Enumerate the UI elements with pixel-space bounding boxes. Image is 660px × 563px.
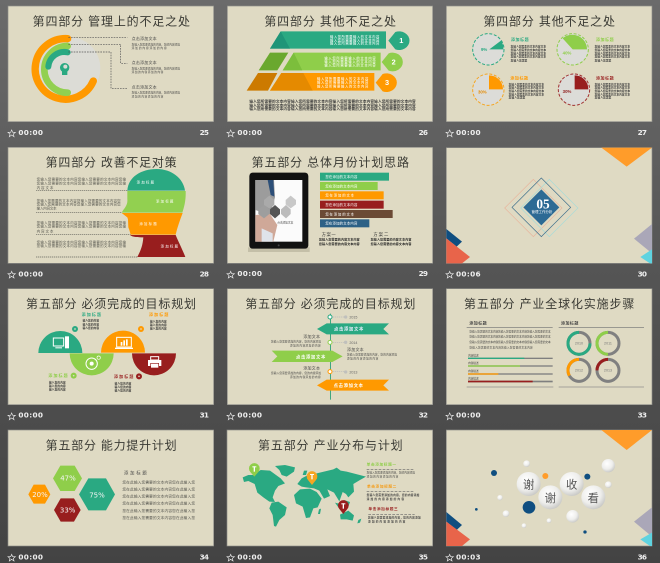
footer: 26 [419,128,428,137]
slide 31: goal semicircles [8,289,214,420]
progress bars: 内容描述 [468,376,479,380]
plan one [319,231,360,246]
concentric ring chart [35,37,100,100]
footer: 27 [638,128,647,137]
hexagon 47% [53,466,82,491]
ribbon teal [317,323,389,334]
ribbon green: 点击添加文本 [296,353,326,360]
pie captions: 您输入您需要的文本内容文本 [509,86,544,90]
slide 30: section divider 05 [446,148,652,278]
head silhouette: 添加标题 [161,244,179,249]
slide 28: head diagram [8,147,214,278]
plan one: 方案一 [322,231,336,238]
map legend [367,461,421,524]
pie captions: 您输入您需要 [595,96,612,100]
head silhouette [122,169,186,257]
left text rows: 输入内容文本 [37,205,57,210]
goal labels: 输入您的内容 [150,327,167,331]
left column text [467,320,553,349]
goal labels: 输入您的内容 [49,380,66,384]
map legend: 添加的内容添加的内容 [367,497,404,501]
slide 35: world map [227,430,433,561]
footer: 33 [638,411,647,420]
timeline captions: 您输入您需要添加的内容，您的内容添加 [271,340,321,344]
ribbon orange: 点击添加文本 [334,382,364,389]
donut charts: 2013 [604,369,612,373]
tablet photo [248,173,310,252]
timeline captions: 添加文本 [303,333,320,339]
horizontal bars [320,173,393,227]
left text rows: 您输入您需要的文本内容您输入您需要的文本内容您输 [37,239,126,244]
map pins [249,463,349,514]
footer: 00:06 [456,269,481,278]
head silhouette: 添加标题 [137,180,155,185]
tablet photo: 点击添加文本 [277,220,294,224]
left text rows: 您输入您需要的文本内容您输入您需要的文本内容您 [37,198,121,203]
pie captions: 您输入您需要的文本内容文本 [511,51,546,55]
number diamond [523,189,559,225]
slide 33: bars and donuts [446,289,652,420]
marker dots [71,326,144,379]
pyramid tier 3: 输入您所需要输入的文本内容 [317,76,369,81]
left column text: 您输入您需要的文本内容您输入您需要的文本内容您输入您需要的文本 [469,340,551,344]
pie captions: 您输入您需要 [595,58,612,62]
right text block [122,469,195,520]
dense text block [249,99,416,111]
footer [227,552,428,561]
callout text: 添加的内容添加的内容 [132,70,164,74]
donut charts: 2011 [604,342,612,346]
right text block: 您在此输入您需要的文本内容您在此输入您 [122,486,195,491]
number diamond: 管理工作分析 [532,209,553,214]
progress bars: 内容描述 [468,369,479,373]
left column text: 您输入您需要的文本内容您输入您需要的文本内容 [469,345,533,349]
world map [243,465,366,527]
goal labels: 输入您的内容 [49,384,66,388]
footer: 00:00 [18,269,43,278]
footer: 30 [638,269,647,278]
left text rows: 您输入您需要的文本内容您输入您需要的文本内容您输 [37,220,126,225]
left text rows: 内容文本 [37,228,54,233]
dense text block: 输入您所需要的文本内容输入您所需要的文本内容输入您所需要的文本内容输入您所需要的文本内容 [249,106,416,111]
goal labels: 输入您的内容 [115,381,132,385]
goal labels: 输入您的内容 [83,322,99,326]
timeline captions: 添加的内容添加的内容 [347,356,379,360]
title: 第五部分 产业分布与计划 [258,437,403,452]
head silhouette: 添加标题 [156,199,174,204]
callout text: 点击添加文本 [132,84,157,90]
thank-you circles: 谢 [545,491,556,505]
year markers: 2013 [349,371,357,375]
goal labels: 输入您的内容 [115,389,132,393]
map legend: 添加的内容添加的内容 [367,474,399,478]
right text block: 您在此输入您需要的文本内容您在此输入您 [122,508,195,513]
footer [8,552,209,561]
timeline captions: 您输入您需要添加的内容，您的内容添加 [347,352,397,356]
pie teal [473,34,504,65]
left column text: 添加标题 [469,320,487,326]
footer [446,269,647,278]
hexagon 33%: 33% [60,507,76,515]
map legend: 添加的内容添加的内容 [368,520,406,524]
timeline captions: 您输入您需要添加的内容，您的内容添加 [271,371,321,375]
goal labels: 输入您的内容 [83,319,99,323]
year markers: 2015 [349,316,357,320]
footer: 00:00 [237,128,262,137]
title: 第五部分 能力提升计划 [46,437,177,452]
goal labels: 输入您的内容 [150,319,167,323]
hexagon 33% [54,498,81,522]
plan two: 您输入您需要的内容文本内容 [371,237,411,242]
red semicircle with printer icon [132,353,176,375]
pie captions: 添加标题 [596,74,614,80]
footer: 35 [419,552,428,561]
title: 第五部分 总体月份计划思路 [252,155,409,170]
pyramid tier 1: 输入您所需要输入的文本内容 [330,37,380,42]
slide 27: four pie charts [446,6,652,137]
horizontal bars: 您在添加的文本 [325,193,355,198]
left text rows: 您输入您需要的文本内容您输入您需要的文本内容您输 [37,180,126,185]
pie orange [473,74,504,105]
pyramid tier 1 [270,31,386,49]
goal labels: 输入您的内容 [49,388,66,392]
plan one: 您输入您需要的内容文本内容 [319,237,360,242]
left text rows: 您输入您需要的文本内容您输入您需要的文本内容您 [37,202,121,207]
goal labels: 输入您的内容 [83,326,99,330]
footer: 28 [200,269,209,278]
year markers [328,315,357,375]
pie captions: 您输入您需要 [509,96,526,100]
footer [8,269,209,278]
hexagon 75% [79,478,115,510]
plan two [371,231,411,246]
title: 第四部分 其他不足之处 [264,13,396,28]
pie captions: 您输入您需要的文本内容文本 [509,82,544,86]
callout text: 您输入您需要添加的内容，您的内容添加 [132,91,180,95]
pie captions: 您输入您需要的文本内容文本 [595,86,630,90]
timeline captions [271,333,397,379]
goal labels: 添加标题 [48,372,68,378]
pyramid tier 2 [259,53,381,70]
footer: 00:00 [237,411,262,420]
map legend: 您输入您需要添加的内容，您的内容添加 [367,493,420,497]
horizontal bars: 您在添加的文本内容 [325,202,358,207]
horizontal bars: 您在添加的文本内容 [325,174,358,179]
footer: 00:00 [456,128,481,137]
map legend: 单击添加标题二 [367,484,397,489]
teal semicircle with computer icon [38,331,82,353]
corner shapes [446,430,652,546]
number badges: 1 [399,36,403,45]
year markers: 2014 [349,341,357,345]
donut charts: 2012 [575,369,583,373]
thank-you circles: 收 [566,477,577,491]
footer: 32 [419,411,428,420]
right text block: 添加标题 [124,469,147,476]
dense text block: 输入您所需要的文本内容输入您所需要的文本内容输入您所需要的文本内容输入您所需要的文本内容 [249,102,416,107]
pyramid tier 2: 输入您所需要输入的文本内容 [324,63,376,68]
pie red [558,74,590,105]
right text block: 您在此输入您需要的文本内容您在此输入您 [122,501,195,506]
footer [446,552,647,561]
title: 第五部分 必须完成的目标规划 [245,296,415,311]
slide 32: timeline [227,289,433,420]
hexagon 20%: 20% [32,491,48,499]
pyramid tier 2: 输入您所需要输入的文本内容 [324,55,376,60]
pie captions: 添加标题 [510,74,528,80]
horizontal bars: 您在添加的文本 [325,211,355,216]
footer [227,411,428,420]
pyramid tier 1: 输入您所需要输入的文本内容 [330,34,380,39]
timeline captions: 添加文本 [347,346,364,352]
pie captions: 您输入您需要的文本内容文本 [595,55,630,59]
left column text: 您输入您需要的文本内容您输入您需要的文本内容您输入您需要的文本 [469,335,551,339]
pie captions: 您输入您需要的文本内容文本 [511,48,546,52]
slide 34: hexagons [8,430,214,561]
footer: 00:03 [456,552,481,561]
left text rows [37,177,126,248]
goal labels: 输入您的内容 [150,323,167,327]
title: 第四部分 其他不足之处 [483,13,615,28]
number badges [376,31,410,92]
plan two: 您输入您需要的内容文本内容 [371,241,411,246]
footer [227,128,428,137]
callout text: 点击添加文本 [132,59,157,65]
pie captions: 您输入您需要 [511,58,528,62]
callout text: 您输入您需要添加的内容，您的内容添加 [132,66,180,70]
number diamond: 05 [536,196,550,211]
pie green [557,34,588,65]
goal labels: 添加标题 [114,373,133,379]
goal labels: 添加标题 [149,311,168,317]
footer: 00:00 [18,411,43,420]
pie captions: 添加标题 [511,36,529,42]
timeline captions: 添加的内容添加的内容 [290,375,321,379]
pie captions: 您输入您需要的文本内容文本 [595,82,630,86]
slide 26: pyramid [227,6,433,137]
footer [8,411,209,420]
footer: 00:00 [237,552,262,561]
pie captions: 您输入您需要的文本内容文本 [509,92,544,96]
pie captions: 您输入您需要的文本内容文本 [511,45,546,49]
number badges: 2 [392,58,396,67]
footer: 31 [200,411,209,420]
title: 第五部分 产业全球化实施步骤 [464,296,634,311]
footer: 25 [200,128,209,137]
pyramid tier 3: 输入您所需要输入的文本内容 [317,83,369,88]
pyramid tier 3 [247,73,374,91]
donut charts: 添加标题 [561,320,578,326]
dense text block: 输入您所需要的文本内容输入您所需要的文本内容输入您所需要的文本内容输入您所需要的文本内容 [249,99,416,104]
goal labels: 输入您的内容 [115,385,132,389]
hexagon 20% [28,485,50,504]
footer: 36 [638,552,647,561]
timeline captions: 添加的内容添加的内容 [290,343,321,347]
pie captions: 添加标题 [596,36,614,42]
right text block: 您在此输入您需要的文本内容您在此输入您 [122,515,195,520]
footer: 00:00 [456,411,481,420]
pie captions: 您输入您需要的文本内容文本 [595,89,630,93]
goal labels [48,311,168,393]
orange semicircle with chart icon [101,331,145,353]
slide 25: management shortcomings [8,6,214,137]
plan one: 您输入您需要的内容文本内容 [319,241,360,246]
left column text: 您输入您需要的文本内容您输入您需要的文本内容您输入您需要的文本 [469,330,551,334]
pie green: 40% [563,50,571,55]
ribbon orange [317,380,389,391]
horizontal bars: 您在添加的文本内容 [325,183,358,188]
right text block: 您在此输入您需要的文本内容您在此输入您 [122,494,195,499]
left text rows: 您输入您需要的文本内容您输入您需要的文本内容您输 [37,177,126,182]
pie captions: 您输入您需要的文本内容文本 [511,55,546,59]
green semicircle with piggy icon [70,353,114,375]
decorative dots [475,459,615,534]
map legend: 单击添加标题一 [367,461,396,466]
diamond outlines [505,178,578,237]
pie teal: 9% [481,47,487,52]
map legend: 您输入您需要添加的内容，您的内容添加 [367,470,415,474]
map legend: 您输入您需要添加的内容，您的内容添加 [368,516,421,520]
progress bars: 内容描述 [468,361,479,365]
callout text: 您输入您需要添加的内容，您的内容添加 [132,42,180,46]
footer: 00:00 [18,552,43,561]
pie captions: 您输入您需要的文本内容文本 [595,51,630,55]
hexagon 47%: 47% [60,474,76,482]
donut charts: 2010 [575,342,583,346]
progress bars [467,353,553,387]
pyramid tier 3: 输入您所需要输入的文本内容 [317,80,369,85]
dashed row rules [36,191,137,257]
title: 第四部分 改善不足对策 [46,155,177,170]
goal labels: 添加标题 [82,311,101,317]
pyramid tier 1: 输入您所需要输入的文本内容 [330,41,380,46]
thank-you circles: 谢 [523,477,534,491]
pyramid tier 2: 输入您所需要输入的文本内容 [324,59,376,64]
number badges: 3 [385,78,389,87]
thank-you circles [517,472,605,509]
footer: 00:00 [18,128,43,137]
thank-you circles: 看 [588,491,599,505]
hexagon 75%: 75% [89,491,105,499]
timeline captions: 添加文本 [303,365,320,371]
pie red: 30% [563,89,571,94]
progress bars: 内容描述 [468,353,479,357]
left text rows: 您输入您需要的文本内容您输入您需要的文本内容您输 [37,224,126,229]
map legend: 单击添加标题三 [368,506,398,511]
slide 29: monthly plan [227,147,433,278]
left text rows: 您输入您需要的文本内容您输入您需要的文本内容您输 [37,243,126,248]
footer: 29 [419,269,428,278]
ribbon teal: 点击添加文本 [334,326,364,333]
dashed leader lines [68,38,127,88]
footer [446,128,647,137]
pie captions: 您输入您需要的文本内容文本 [595,48,630,52]
head silhouette: 添加标题 [139,221,157,226]
footer [227,269,428,278]
pie captions: 您输入您需要的文本内容文本 [509,89,544,93]
callout text: 添加的内容添加的内容 [132,46,167,50]
slide 36: thank you [446,430,652,561]
footer [8,128,209,137]
donut charts [559,320,644,387]
callout text: 点击添加文本 [132,35,157,41]
timeline axis [330,314,331,400]
right text block: 您在此输入您需要的文本内容您在此输入您 [122,479,195,484]
corner shapes [446,148,652,263]
horizontal bars: 您在添加的文本内容 [325,221,358,226]
title: 第五部分 必须完成的目标规划 [26,296,196,311]
callout text [132,35,180,98]
footer: 00:00 [237,269,262,278]
callout text: 添加的内容添加的内容 [132,94,164,98]
pie captions: 您输入您需要的文本内容文本 [595,45,630,49]
title: 第四部分 管理上的不足之处 [33,13,190,28]
footer [446,411,647,420]
ribbon green [272,351,343,362]
pie captions [509,36,630,100]
left text rows: 内容文本 [37,185,54,190]
footer: 34 [200,552,209,561]
pie captions: 您输入您需要的文本内容文本 [595,92,630,96]
pie orange: 30% [478,89,487,94]
plan two: 方案二 [373,231,389,238]
